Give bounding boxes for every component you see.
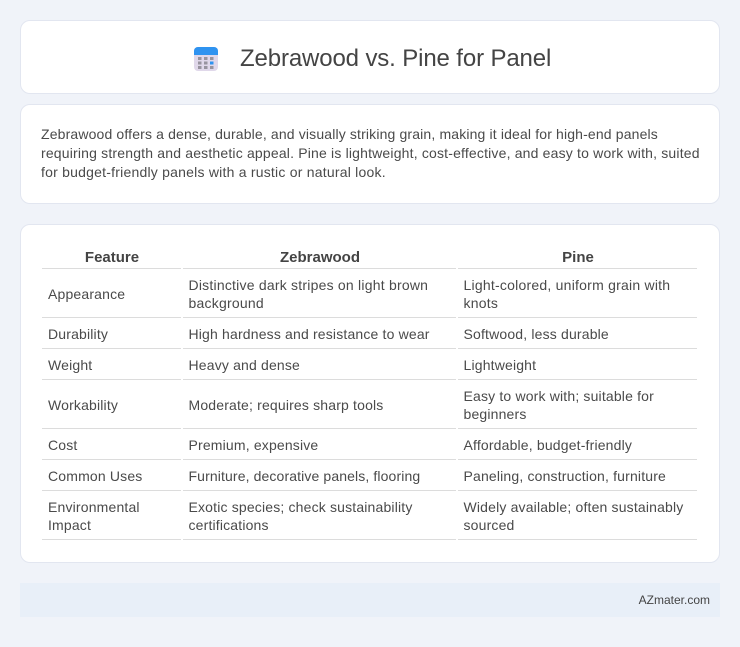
comparison table panel: Lightweight	[464, 357, 536, 373]
comparison table panel	[20, 224, 720, 563]
summary text	[41, 126, 700, 180]
row: Environmental Impact	[48, 499, 140, 533]
footer credit: AZmater.com	[639, 593, 710, 607]
footer bar	[20, 583, 720, 617]
row: Workability: Workability	[48, 397, 118, 413]
comparison table panel: Easy to work with; suitable for	[464, 388, 654, 404]
comparison table panel: Premium, expensive	[188, 437, 318, 453]
comparison table panel: knots	[464, 295, 498, 311]
comparison table panel: Distinctive dark stripes on light brown	[188, 277, 428, 293]
summary text: for budget-friendly panels with a rustic or natural look.	[41, 164, 386, 180]
comparison table panel: background	[188, 295, 264, 311]
comparison table panel: Affordable, budget-friendly	[464, 437, 632, 453]
table header: Pine: Pine	[562, 249, 594, 266]
summary panel	[20, 104, 720, 204]
summary text: requiring strength and aesthetic appeal. Pine is lightweight, cost-effective, and easy to work with, suited	[41, 145, 700, 161]
header panel	[20, 20, 720, 94]
row: Environmental Impact: Impact	[48, 517, 91, 533]
comparison table panel: Light-colored, uniform grain with	[464, 277, 670, 293]
row: Cost: Cost	[48, 437, 77, 453]
table header: Zebrawood: Zebrawood	[280, 249, 360, 266]
row: Weight: Weight	[48, 357, 92, 373]
table header: Feature: Feature	[85, 249, 139, 266]
row: Durability: Durability	[48, 326, 108, 342]
comparison table panel: Paneling, construction, furniture	[464, 468, 666, 484]
comparison table panel: Softwood, less durable	[464, 326, 609, 342]
title: Zebrawood vs. Pine for Panel	[240, 45, 551, 72]
row: Common Uses: Common Uses	[48, 468, 142, 484]
comparison table panel: High hardness and resistance to wear	[188, 326, 430, 342]
row: Appearance: Appearance	[48, 286, 125, 302]
summary text: Zebrawood offers a dense, durable, and visually striking grain, making it ideal for high-end panels	[41, 126, 658, 142]
comparison table panel: Exotic species; check sustainability	[188, 499, 412, 515]
comparison table panel: beginners	[464, 406, 527, 422]
comparison table panel: Furniture, decorative panels, flooring	[188, 468, 420, 484]
icon: calendar	[194, 47, 218, 71]
comparison table panel: Widely available; often sustainably	[464, 499, 683, 515]
row: Environmental Impact: Environmental	[48, 499, 140, 515]
comparison table panel: Moderate; requires sharp tools	[188, 397, 383, 413]
comparison table panel: Heavy and dense	[188, 357, 300, 373]
comparison table panel: sourced	[464, 517, 514, 533]
comparison table panel: certifications	[188, 517, 269, 533]
